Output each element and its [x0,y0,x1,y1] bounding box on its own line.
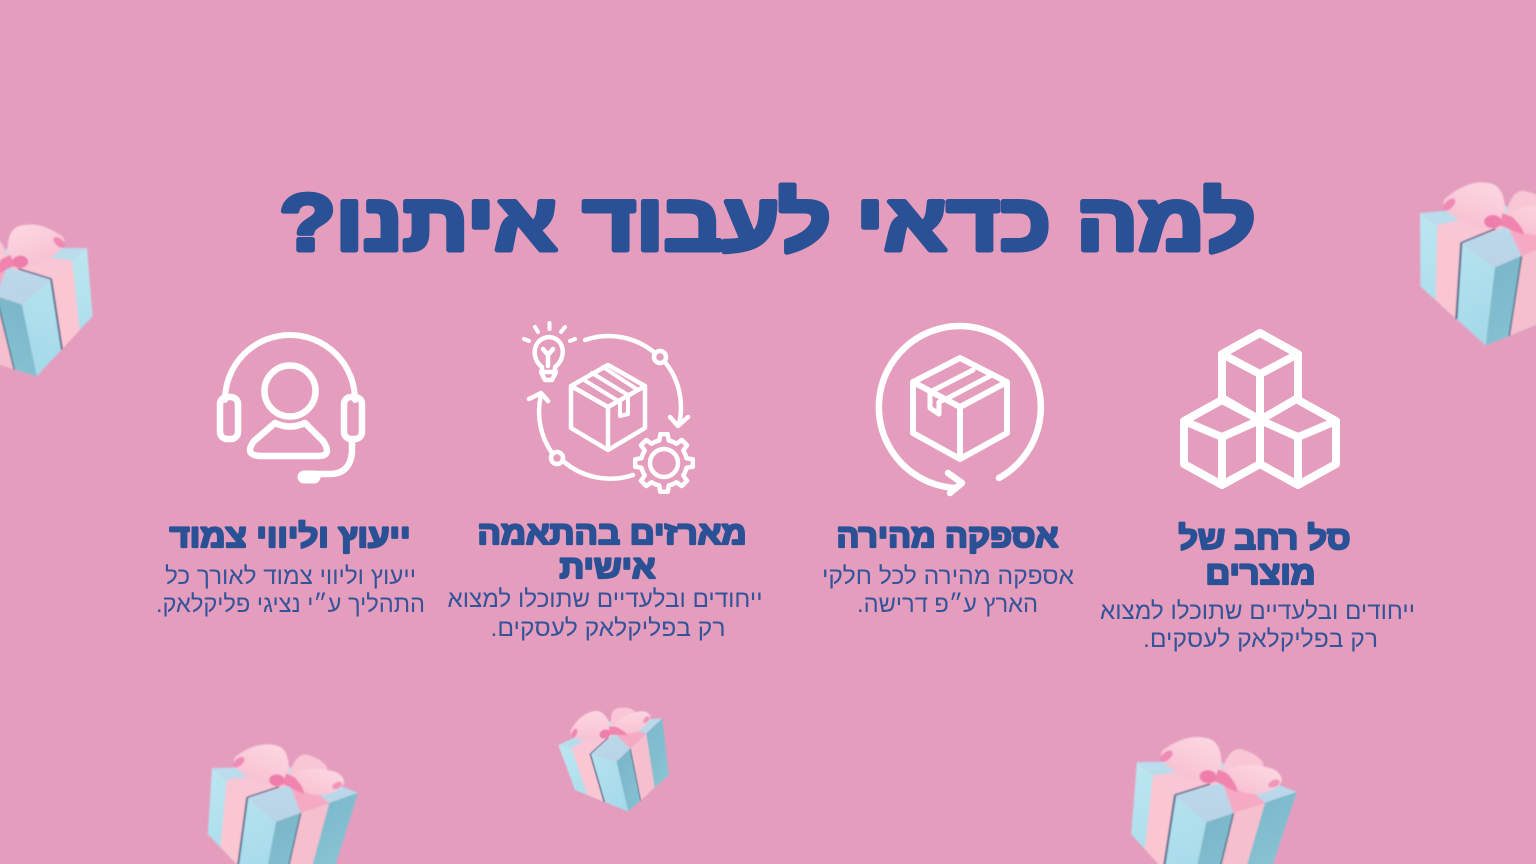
icon: stacked cubes [1184,333,1336,485]
text: personalised packages description: רק בפליקלאק לעסקים. [490,615,726,642]
panel: wide product range [1100,333,1415,653]
text: fast delivery description: אספקה מהירה לכל חלקי [822,563,1074,590]
text: personalised packages description: ייחודים ובלעדיים שתוכלו למצוא [448,586,762,613]
heading: fast delivery: אספקה מהירה [836,518,1059,554]
text: wide product range description: ייחודים ובלעדיים שתוכלו למצוא [1100,598,1415,625]
gear [650,449,678,477]
gift: left [0,200,127,401]
heading: personalised packages: אישית [560,549,656,585]
heading: personalised packages [478,515,746,585]
gift: bottom left [175,721,372,864]
heading: wide product range: מוצרים [1206,555,1316,591]
heading: wide product range: סל רחב של [1178,520,1350,556]
text: consulting and support description [156,563,425,618]
text: fast delivery description: הארץ ע״פ דרישה. [857,591,1038,618]
panel: personalised packages [448,323,762,642]
gift: top right [1385,159,1536,367]
title: למה כדאי לעבוד איתנו? [280,178,1256,267]
text: wide product range description: רק בפליקלאק לעסקים. [1143,626,1378,653]
text: consulting and support description: התהליך ע״י נציגי פליקלאק. [156,591,425,618]
icon: box, bulb and gear cycle [524,323,693,492]
bulb [535,337,563,380]
heading: consulting and support: ייעוץ וליווי צמוד [170,518,410,554]
icon: headset agent [220,335,362,477]
text: fast delivery description [822,563,1074,618]
icon: box with circular arrow [879,326,1041,493]
heading: personalised packages: מארזים בהתאמה [478,515,746,551]
text: wide product range description [1100,598,1415,653]
gift: bottom right [1094,711,1313,864]
text: personalised packages description [448,586,762,642]
panel: fast delivery [822,326,1074,618]
panel: consulting and support [156,335,425,618]
text: consulting and support description: ייעוץ וליווי צמוד לאורך כל [165,563,416,590]
gift: bottom centre [558,708,669,812]
heading: wide product range [1178,520,1350,591]
